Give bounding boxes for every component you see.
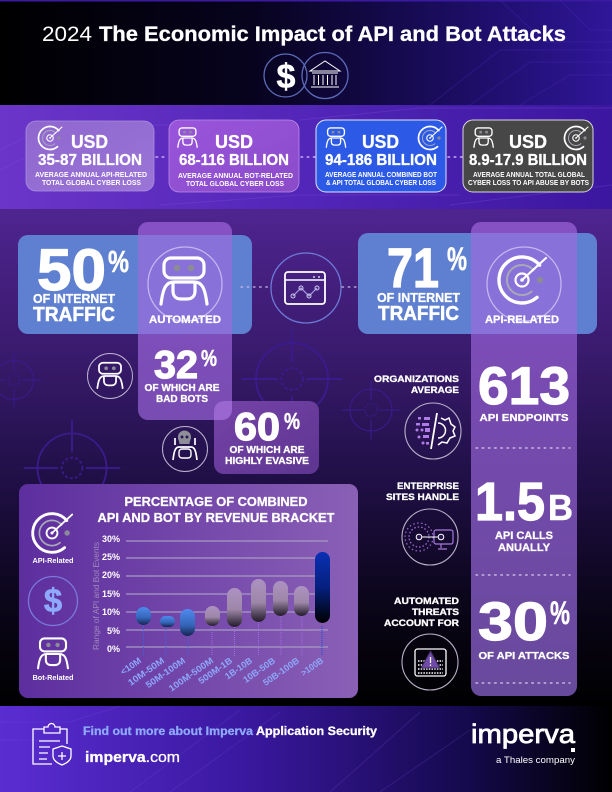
footer call to action: Find out more about Imperva: [83, 726, 254, 738]
panel: 71 percent traffic: %: [447, 241, 467, 277]
chart grid and y labels: 10%: [102, 607, 120, 617]
text: automated threats: [384, 596, 459, 629]
card: bot-related loss: [169, 120, 299, 192]
icon: API radar: [487, 247, 561, 321]
card: API-related loss: TOTAL GLOBAL CYBER LOSS: [42, 180, 141, 187]
card: API-related loss: AVERAGE ANNUAL API-RELATED: [35, 172, 147, 179]
card: combined loss: 94-186 BILLION: [325, 152, 437, 169]
chart x labels: >100B: [299, 655, 326, 678]
stat: 1.5B API calls: [475, 472, 573, 554]
stat: 613 API endpoints: API ENDPOINTS: [480, 412, 568, 424]
text: enterprise sites handle: ENTERPRISE: [397, 481, 459, 492]
title: 2024: [42, 22, 92, 46]
panel: 60 percent evasive: 60: [234, 406, 280, 449]
text: organizations average: ORGANIZATIONS: [374, 374, 459, 385]
icon: evasive bot: [162, 426, 208, 472]
chart stems: [144, 616, 322, 656]
stat: 32 percent bad bots: BAD BOTS: [156, 394, 208, 405]
card: combined loss: USD: [362, 131, 399, 152]
card: bot-related loss: AVERAGE ANNUAL BOT-RELATED: [178, 173, 293, 180]
label: automated: AUTOMATED: [149, 314, 221, 326]
stat: 32 percent bad bots: [144, 344, 220, 405]
panel: API column: [471, 222, 577, 696]
stat: 1.5B API calls: 1.5: [475, 472, 545, 532]
stat: 30 percent API attacks: [478, 592, 570, 662]
panel: 71 percent traffic: OF INTERNET: [377, 290, 460, 305]
panel: 50 percent traffic: %: [108, 244, 129, 279]
stat: 30 percent API attacks: 30: [478, 592, 548, 652]
panel: 60 percent evasive: OF WHICH ARE: [230, 445, 305, 456]
panel: 71 percent traffic: [358, 233, 597, 334]
card: API-related loss: [26, 121, 154, 191]
label: API-related: API-RELATED: [485, 314, 559, 326]
logo: imperva: imperva: [471, 719, 576, 749]
chart x labels: <10M: [119, 655, 143, 677]
chart x labels: 50B-100B: [261, 655, 302, 688]
icon: web analytics: [271, 253, 341, 323]
panel: 50 percent traffic: OF INTERNET: [33, 291, 115, 306]
text: enterprise sites handle: SITES HANDLE: [386, 492, 459, 503]
chart x labels: 1B-10B: [223, 655, 255, 681]
panel: 50 percent traffic: TRAFFIC: [33, 304, 115, 326]
stat: 30 percent API attacks: OF API ATTACKS: [478, 650, 570, 662]
chart x labels: 10B-50B: [241, 655, 278, 685]
card: API abuse by bots: [463, 120, 593, 192]
legend: API-related: [32, 514, 74, 565]
chart bars: [136, 552, 330, 636]
stat: 30 percent API attacks: %: [550, 595, 570, 631]
chart x labels: 50M-100M: [144, 655, 187, 690]
card: combined loss: & API TOTAL GLOBAL CYBER LOSS: [326, 180, 436, 187]
icon: dollar and bank: [264, 52, 348, 98]
y axis title: Range of API and Bot Events: [92, 542, 101, 650]
icon: threat warning: [402, 634, 458, 690]
panel: automated column: [138, 222, 232, 420]
main background: [0, 209, 612, 706]
card: combined loss: [316, 120, 446, 192]
logo: imperva: [471, 719, 576, 766]
card: bot-related loss: TOTAL GLOBAL CYBER LOSS: [186, 181, 284, 188]
panel: 50 percent traffic: 50: [37, 238, 106, 303]
stat: 1.5B API calls: ANUALLY: [498, 542, 551, 554]
logo: imperva: a Thales company: [496, 755, 575, 766]
band background: [0, 105, 612, 209]
text: organizations average: [374, 374, 459, 396]
chart title: PERCENTAGE OF COMBINED: [124, 494, 308, 509]
panel: 60 percent evasive: HIGHLY EVASIVE: [225, 456, 309, 467]
stat: 1.5B API calls: API CALLS: [495, 530, 553, 542]
panel: revenue bracket chart: [19, 484, 358, 698]
chart grid and y labels: 15%: [102, 589, 120, 599]
panel: 71 percent traffic: TRAFFIC: [378, 303, 459, 325]
card: bot-related loss: 68-116 BILLION: [179, 152, 289, 169]
panel: 60 percent evasive: [214, 401, 319, 474]
card: API abuse by bots: AVERAGE ANNUAL TOTAL GLOBAL: [473, 172, 586, 179]
chart grid and y labels: 20%: [102, 570, 120, 580]
stat: 32 percent bad bots: %: [201, 345, 217, 371]
footer background: [0, 706, 612, 792]
chart x labels: 10M-50M: [126, 655, 166, 688]
chart title: API AND BOT BY REVENUE BRACKET: [98, 510, 335, 525]
text: organizations average: AVERAGE: [411, 385, 459, 396]
icon: clipboard shield: [33, 724, 71, 765]
stat: 32 percent bad bots: 32: [154, 344, 198, 387]
text: enterprise sites handle: [386, 481, 459, 503]
footer call to action: Application Security: [256, 726, 378, 738]
icon: bad bot: [88, 354, 132, 398]
header background: [0, 0, 612, 105]
chart grid and y labels: [102, 534, 328, 654]
text: automated threats: THREATS: [412, 607, 459, 618]
legend: API-related: API-Related: [32, 556, 74, 565]
panel: 50 percent traffic: [18, 235, 252, 334]
card: API-related loss: USD: [71, 131, 108, 152]
text: automated threats: AUTOMATED: [394, 596, 459, 607]
card: API abuse by bots: CYBER LOSS TO API ABUSE BY BOTS: [468, 180, 589, 187]
card: bot-related loss: USD: [215, 131, 253, 152]
icon: endpoints gear: [405, 403, 461, 459]
chart grid and y labels: 5%: [107, 626, 120, 636]
footer call to action: [83, 726, 378, 766]
icon: dollar: [28, 576, 78, 626]
chart grid and y labels: 25%: [102, 552, 120, 562]
icon: dollar and bank: $: [277, 58, 296, 96]
card: API-related loss: 35-87 BILLION: [38, 152, 142, 169]
chart x labels: [119, 655, 326, 693]
chart x labels: 100M-500M: [167, 655, 215, 693]
icon: API calls: [402, 509, 458, 565]
stat: 1.5B API calls: B: [548, 487, 573, 528]
card: combined loss: AVERAGE ANNUAL COMBINED BOT: [325, 172, 438, 179]
icon: dollar: $: [44, 582, 62, 619]
chart title: [98, 494, 335, 525]
footer call to action: imperva.com: [85, 749, 180, 766]
chart x labels: 500M-1B: [196, 655, 235, 686]
card: API abuse by bots: USD: [509, 131, 547, 152]
card: API abuse by bots: 8.9-17.9 BILLION: [469, 152, 587, 169]
title: The Economic Impact of API and Bot Attacks: [99, 22, 566, 46]
panel: 60 percent evasive: %: [284, 408, 300, 434]
chart grid and y labels: 30%: [102, 534, 120, 544]
legend: bot-related: [32, 638, 74, 682]
text: automated threats: ACCOUNT FOR: [384, 618, 459, 629]
panel: 71 percent traffic: 71: [387, 236, 439, 299]
legend: bot-related: Bot-Related: [32, 673, 74, 682]
stat: 613 API endpoints: 613: [478, 357, 570, 416]
chart grid and y labels: 0%: [107, 644, 120, 654]
stat: 32 percent bad bots: OF WHICH ARE: [144, 383, 220, 394]
icon: automated bot: [148, 247, 222, 321]
